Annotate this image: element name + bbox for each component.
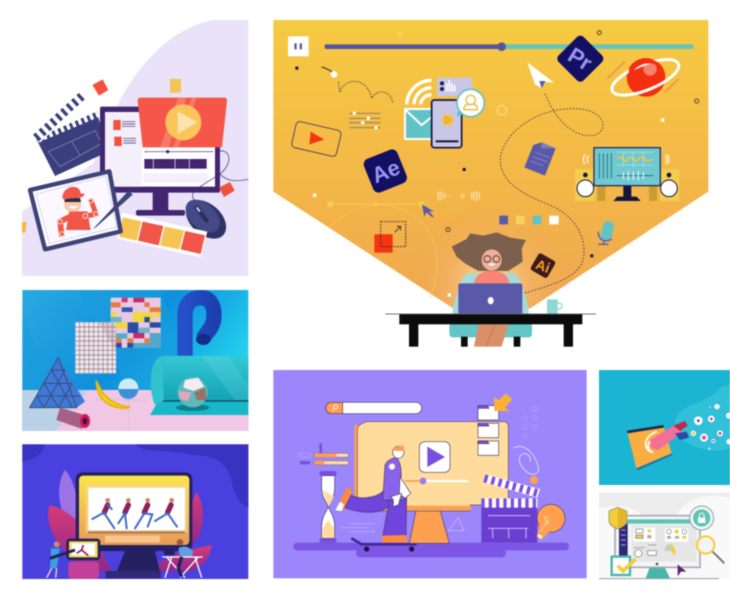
video player card xyxy=(138,98,227,147)
panel: yellow projection scene with creative apps xyxy=(273,20,708,347)
tablet with character xyxy=(30,171,121,249)
icon: play button xyxy=(419,442,450,472)
folders xyxy=(478,406,499,455)
person with hair xyxy=(452,232,526,292)
icon: chart card xyxy=(437,78,472,96)
icon: planet xyxy=(607,52,683,102)
icon: After Effects xyxy=(362,148,409,194)
stylus xyxy=(93,191,133,229)
light swoosh xyxy=(672,385,730,451)
progress bar xyxy=(325,42,693,51)
small markers xyxy=(295,31,699,297)
panel: animation frames on monitor xyxy=(22,444,248,579)
audio workstation xyxy=(575,148,679,201)
pipe opening xyxy=(196,334,211,345)
icon: blue pipe xyxy=(185,298,214,356)
ground line xyxy=(599,577,719,580)
dashboard cards xyxy=(633,528,688,557)
icon: clapperboard xyxy=(33,93,108,176)
cable xyxy=(192,151,248,201)
panel: 3D geometric still life xyxy=(22,290,248,431)
teal background xyxy=(599,370,730,485)
wall background xyxy=(22,290,248,431)
motion path line xyxy=(327,201,437,298)
icon: cursor xyxy=(422,204,434,217)
clapperboard xyxy=(481,474,540,543)
icon: red sticker on cable xyxy=(219,182,235,197)
dark waves xyxy=(22,444,248,508)
icon: shield xyxy=(609,507,627,529)
tablet xyxy=(627,425,672,470)
pink arm with magnet xyxy=(650,421,689,450)
small circle xyxy=(497,106,507,115)
icon: document xyxy=(524,142,556,176)
projection background xyxy=(273,20,708,308)
icon: Premiere Pro: Pr xyxy=(564,42,597,76)
white clouds xyxy=(599,496,730,578)
orange dot xyxy=(530,476,538,484)
panel: video editing workstation illustration xyxy=(22,20,248,276)
rolled mat xyxy=(56,408,90,429)
skateboard xyxy=(351,538,417,552)
desktop monitor xyxy=(76,472,192,578)
icon: user bubble xyxy=(457,89,484,117)
running figures xyxy=(92,498,177,528)
speed lines xyxy=(341,524,375,532)
purple background xyxy=(273,370,587,578)
icon: Illustrator xyxy=(530,252,556,279)
icon: paper plane xyxy=(527,62,554,88)
icon: grid panel xyxy=(75,322,116,373)
floating icons xyxy=(691,404,730,450)
triangle ruler xyxy=(448,518,464,531)
panel: security dashboard xyxy=(599,493,730,579)
icon: orange arrow xyxy=(494,393,512,411)
crystal ball xyxy=(118,378,138,399)
ground bars xyxy=(293,543,569,557)
slider xyxy=(405,478,468,484)
grey background xyxy=(599,493,730,578)
hourglass xyxy=(319,471,337,543)
film strip xyxy=(117,213,207,257)
panel: skateboarder and video player xyxy=(273,370,587,578)
dashed motion curve xyxy=(322,67,393,104)
icon: red sticker xyxy=(92,79,108,96)
teal paper roll xyxy=(150,356,248,415)
icon: video play card xyxy=(291,121,342,157)
chair xyxy=(449,273,532,337)
wall shadow shapes xyxy=(22,290,188,390)
icon: microphone xyxy=(598,220,615,244)
man at desk xyxy=(162,539,203,578)
search bar xyxy=(326,402,422,414)
swirl line xyxy=(513,446,538,474)
projection glow xyxy=(273,20,708,308)
pink stool xyxy=(68,562,99,579)
colour swatches xyxy=(499,216,559,224)
glass pyramid xyxy=(30,358,85,408)
woman drawing xyxy=(47,541,75,578)
icon: colour mosaic xyxy=(111,298,161,348)
banana xyxy=(97,382,130,408)
lavender background shape xyxy=(22,20,248,276)
character xyxy=(58,187,98,237)
floor xyxy=(22,390,248,431)
sliders icon xyxy=(349,112,381,129)
leaves xyxy=(48,470,212,572)
monitor xyxy=(615,516,700,567)
icon: yellow sticker xyxy=(170,79,181,93)
icon: magnifier xyxy=(697,536,724,563)
progress bars xyxy=(299,443,348,465)
panel: tablet and magnet xyxy=(599,370,730,485)
sound wave xyxy=(438,191,479,201)
icon: computer mouse xyxy=(178,192,234,246)
mug xyxy=(547,299,562,314)
icon: check box xyxy=(612,557,636,575)
icon: phone xyxy=(432,100,462,148)
icon: wifi waves xyxy=(407,80,431,104)
laptop xyxy=(458,283,522,314)
icon: Illustrator: Ai xyxy=(534,256,552,276)
icon: envelope xyxy=(405,109,435,139)
faceted ball xyxy=(176,377,209,411)
monitor stand xyxy=(646,567,670,578)
skateboarder xyxy=(335,445,411,543)
desk xyxy=(385,314,596,347)
icon: pause button xyxy=(288,36,309,56)
small tablet with runner xyxy=(66,539,100,560)
icon: cursor xyxy=(678,564,686,576)
icon: After Effects: Ae xyxy=(368,154,404,188)
monitor stand xyxy=(409,510,449,543)
blue background xyxy=(22,444,248,579)
icon: scale box xyxy=(374,222,406,253)
dashed flight path xyxy=(500,94,603,294)
monitor xyxy=(100,107,220,216)
decorative dots xyxy=(523,407,537,439)
icon: yellow fragment xyxy=(22,222,27,233)
monitor xyxy=(354,422,508,511)
icon: Premiere Pro xyxy=(555,34,605,84)
icon: light bulb xyxy=(537,504,565,540)
icon: lock badge xyxy=(690,506,714,530)
